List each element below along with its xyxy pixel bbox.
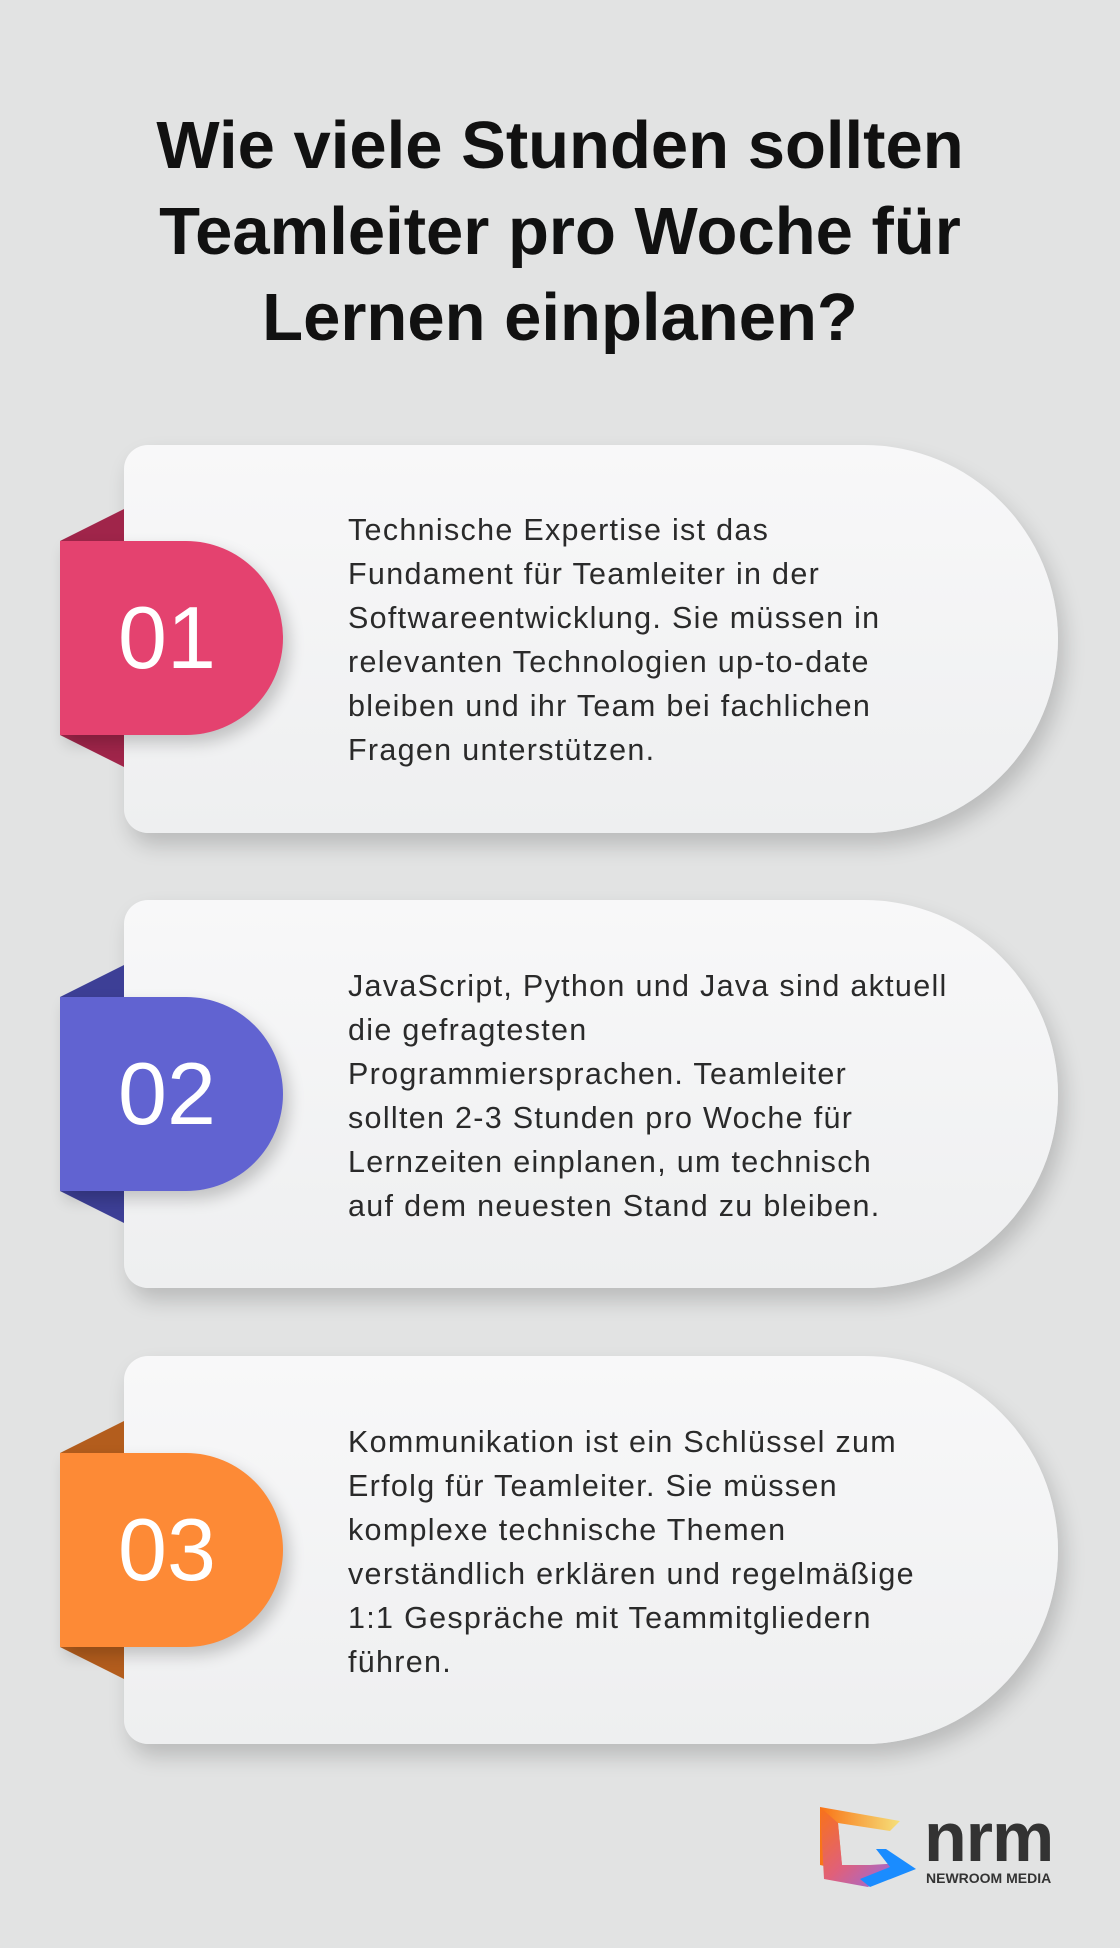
text 2: Programmiersprachen. Teamleiter — [348, 1057, 847, 1091]
text 1: bleiben und ihr Team bei fachlichen — [348, 689, 871, 723]
text 2: JavaScript, Python und Java sind aktuell — [348, 969, 948, 1003]
logo — [820, 1798, 1053, 1887]
text 3: Kommunikation ist ein Schlüssel zum — [348, 1425, 897, 1459]
text 2 — [348, 969, 948, 1223]
title: Wie viele Stunden sollten — [156, 108, 964, 183]
text 2: auf dem neuesten Stand zu bleiben. — [348, 1189, 881, 1223]
text 3: führen. — [348, 1645, 452, 1679]
badge 02: 02 — [118, 1044, 216, 1143]
badge 01 — [59, 509, 296, 767]
logo: NEWROOM MEDIA — [926, 1870, 1051, 1886]
panel: card 1 — [124, 445, 1058, 833]
badge 02 — [59, 965, 296, 1223]
title: Lernen einplanen? — [262, 280, 858, 355]
text 3 — [348, 1425, 915, 1679]
text 3: Erfolg für Teamleiter. Sie müssen — [348, 1469, 838, 1503]
text 1: Technische Expertise ist das — [348, 513, 769, 547]
badge 03 — [59, 1421, 296, 1679]
logo: nrm — [924, 1798, 1053, 1876]
panel: card 2 — [124, 900, 1058, 1288]
text 2: die gefragtesten — [348, 1013, 588, 1047]
text 3: verständlich erklären und regelmäßige — [348, 1557, 915, 1591]
panel: card 3 — [124, 1356, 1058, 1744]
text 1: Softwareentwicklung. Sie müssen in — [348, 601, 880, 635]
title: Teamleiter pro Woche für — [159, 194, 961, 269]
badge 01: 01 — [118, 588, 216, 687]
text 3: komplexe technische Themen — [348, 1513, 786, 1547]
text 1: Fundament für Teamleiter in der — [348, 557, 820, 591]
title — [156, 108, 964, 355]
text 1: Fragen unterstützen. — [348, 733, 655, 767]
text 3: 1:1 Gespräche mit Teammitgliedern — [348, 1601, 872, 1635]
text 2: sollten 2-3 Stunden pro Woche für — [348, 1101, 853, 1135]
text 1 — [348, 513, 880, 767]
icon: logo mark — [820, 1807, 916, 1887]
badge 03: 03 — [118, 1500, 216, 1599]
text 1: relevanten Technologien up-to-date — [348, 645, 870, 679]
text 2: Lernzeiten einplanen, um technisch — [348, 1145, 872, 1179]
